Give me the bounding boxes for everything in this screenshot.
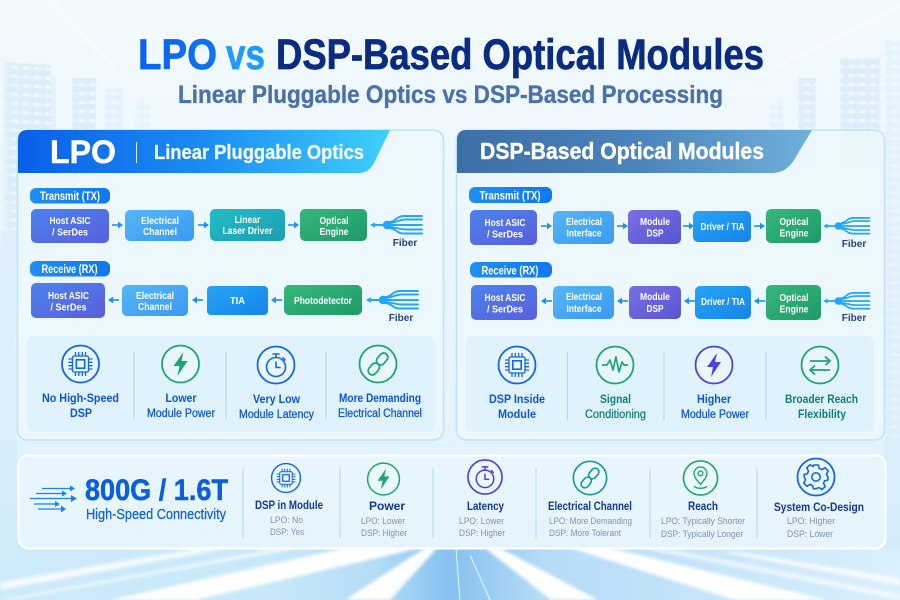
metric: system co-design: LPO: Higher bbox=[787, 516, 835, 527]
metric: electrical channel bbox=[548, 461, 632, 539]
receive label: Receive (RX) bbox=[42, 264, 98, 276]
receive label bbox=[30, 261, 110, 276]
metric: DSP in module: DSP in Module bbox=[255, 500, 323, 512]
metric: reach: Reach bbox=[688, 501, 718, 513]
metric: latency: LPO: Lower bbox=[459, 516, 504, 527]
title bbox=[138, 31, 764, 79]
transmit flow: Laser Driver bbox=[222, 225, 272, 237]
metric: latency: DSP: Higher bbox=[459, 528, 505, 539]
feature: broader reach: Broader Reach bbox=[785, 392, 858, 406]
metric: reach bbox=[661, 461, 745, 540]
metric: system co-design: System Co-Design bbox=[774, 502, 864, 514]
panel: LPO bbox=[18, 130, 444, 440]
transmit flow: Fiber bbox=[393, 238, 417, 249]
receive flow: Channel bbox=[138, 301, 172, 313]
metric: system co-design: DSP: Lower bbox=[787, 529, 833, 540]
metric: DSP in module bbox=[255, 464, 323, 538]
receive flow: TIA bbox=[230, 295, 245, 307]
receive flow bbox=[31, 283, 418, 324]
receive flow: Photodetector bbox=[294, 295, 352, 307]
receive flow: Electrical bbox=[566, 291, 602, 303]
transmit flow: Module bbox=[640, 216, 670, 228]
transmit flow: Interface bbox=[566, 228, 602, 240]
transmit flow bbox=[470, 209, 869, 250]
speed heading bbox=[85, 474, 228, 523]
receive flow: Optical bbox=[780, 292, 809, 304]
icon: speed arrows bbox=[30, 486, 77, 512]
feature: higher power: Higher bbox=[697, 392, 731, 406]
receive flow bbox=[471, 285, 869, 324]
receive flow: Module bbox=[640, 291, 670, 303]
title: DSP-Based Optical Modules bbox=[276, 31, 764, 79]
transmit flow: Optical bbox=[320, 215, 349, 227]
transmit label: Transmit (TX) bbox=[40, 191, 100, 203]
transmit flow: Optical bbox=[780, 216, 809, 228]
transmit flow: DSP bbox=[646, 228, 664, 240]
receive flow: Host ASIC bbox=[48, 290, 89, 302]
feature: lower power bbox=[147, 346, 215, 420]
receive flow: Driver / TIA bbox=[701, 296, 745, 308]
metric: DSP in module: DSP: Yes bbox=[270, 527, 304, 538]
metric: latency: Latency bbox=[467, 501, 505, 513]
LPO header banner: Linear Pluggable Optics bbox=[154, 142, 364, 164]
feature: higher power: Module Power bbox=[681, 409, 749, 421]
feature: DSP inside: DSP Inside bbox=[489, 392, 545, 406]
transmit flow: Host ASIC bbox=[484, 217, 526, 229]
receive flow: Interface bbox=[566, 303, 602, 315]
transmit flow: Electrical bbox=[141, 215, 179, 227]
feature: no DSP: DSP bbox=[70, 406, 92, 420]
feature: low latency: Module Latency bbox=[239, 409, 314, 421]
receive flow: Engine bbox=[780, 304, 809, 316]
title: LPO bbox=[138, 31, 217, 79]
LPO header banner: LPO bbox=[50, 134, 116, 170]
receive flow: / SerDes bbox=[487, 304, 523, 316]
transmit flow: Electrical bbox=[566, 216, 602, 228]
metric: reach: DSP: Typically Longer bbox=[661, 529, 743, 540]
feature: DSP inside bbox=[489, 346, 545, 421]
transmit label bbox=[30, 188, 110, 204]
receive label: Receive (RX) bbox=[482, 266, 539, 278]
transmit flow: Driver / TIA bbox=[700, 221, 745, 233]
feature: lower power: Module Power bbox=[147, 408, 215, 420]
receive flow: Host ASIC bbox=[484, 292, 526, 304]
feature: low latency: Very Low bbox=[253, 392, 301, 406]
feature: electrical channel bbox=[338, 346, 422, 420]
feature: no DSP: No High-Speed bbox=[42, 391, 119, 405]
DSP features bbox=[465, 336, 874, 432]
transmit flow: Linear bbox=[234, 214, 260, 226]
receive flow: / SerDes bbox=[50, 302, 87, 314]
metric: power: DSP: Higher bbox=[361, 528, 407, 539]
DSP header banner: DSP-Based Optical Modules bbox=[480, 138, 764, 164]
feature: signal conditioning: Conditioning bbox=[585, 409, 646, 421]
receive label bbox=[470, 262, 552, 278]
transmit flow: / SerDes bbox=[52, 226, 88, 238]
speed heading: 800G / 1.6T bbox=[85, 474, 228, 507]
transmit flow: Engine bbox=[320, 226, 349, 238]
feature: DSP inside: Module bbox=[498, 407, 536, 421]
feature: lower power: Lower bbox=[166, 391, 197, 405]
LPO header banner bbox=[18, 130, 390, 173]
metric: latency bbox=[459, 460, 505, 539]
DSP header banner bbox=[457, 130, 812, 173]
panel: DSP bbox=[456, 130, 884, 440]
metric: power: LPO: Lower bbox=[361, 516, 405, 527]
transmit label bbox=[469, 187, 552, 203]
transmit label: Transmit (TX) bbox=[480, 190, 541, 202]
metric: system co-design bbox=[774, 458, 864, 540]
subtitle: Linear Pluggable Optics vs DSP-Based Processing bbox=[178, 81, 723, 109]
receive flow: Fiber bbox=[842, 313, 866, 324]
metric: electrical channel: LPO: More Demanding bbox=[549, 516, 632, 527]
metric: DSP in module: LPO: No bbox=[270, 515, 303, 526]
metric: reach: LPO: Typically Shorter bbox=[661, 516, 745, 527]
title: vs bbox=[226, 31, 265, 79]
receive flow: Electrical bbox=[136, 290, 174, 302]
feature: no DSP bbox=[42, 346, 119, 420]
LPO features bbox=[27, 336, 436, 432]
feature: broader reach bbox=[785, 346, 858, 421]
feature: low latency bbox=[239, 346, 314, 421]
feature: electrical channel: More Demanding bbox=[339, 391, 421, 405]
transmit flow: Fiber bbox=[842, 239, 866, 250]
feature: higher power bbox=[681, 346, 749, 421]
transmit flow: Engine bbox=[780, 228, 809, 240]
feature: signal conditioning bbox=[585, 346, 646, 421]
bottom summary strip bbox=[18, 456, 886, 548]
transmit flow: / SerDes bbox=[487, 228, 523, 240]
feature: broader reach: Flexibility bbox=[798, 407, 846, 421]
metric: electrical channel: Electrical Channel bbox=[548, 501, 632, 513]
transmit flow: Host ASIC bbox=[50, 215, 91, 227]
feature: signal conditioning: Signal bbox=[600, 392, 631, 406]
transmit flow: Channel bbox=[143, 226, 177, 238]
receive flow: Fiber bbox=[389, 313, 413, 324]
metric: power bbox=[361, 463, 407, 539]
metric: power: Power bbox=[369, 501, 406, 513]
feature: electrical channel: Electrical Channel bbox=[338, 408, 422, 420]
speed heading: High-Speed Connectivity bbox=[86, 506, 226, 523]
transmit flow bbox=[31, 209, 422, 249]
metric: electrical channel: DSP: More Tolerant bbox=[549, 528, 621, 539]
receive flow: DSP bbox=[646, 303, 664, 315]
